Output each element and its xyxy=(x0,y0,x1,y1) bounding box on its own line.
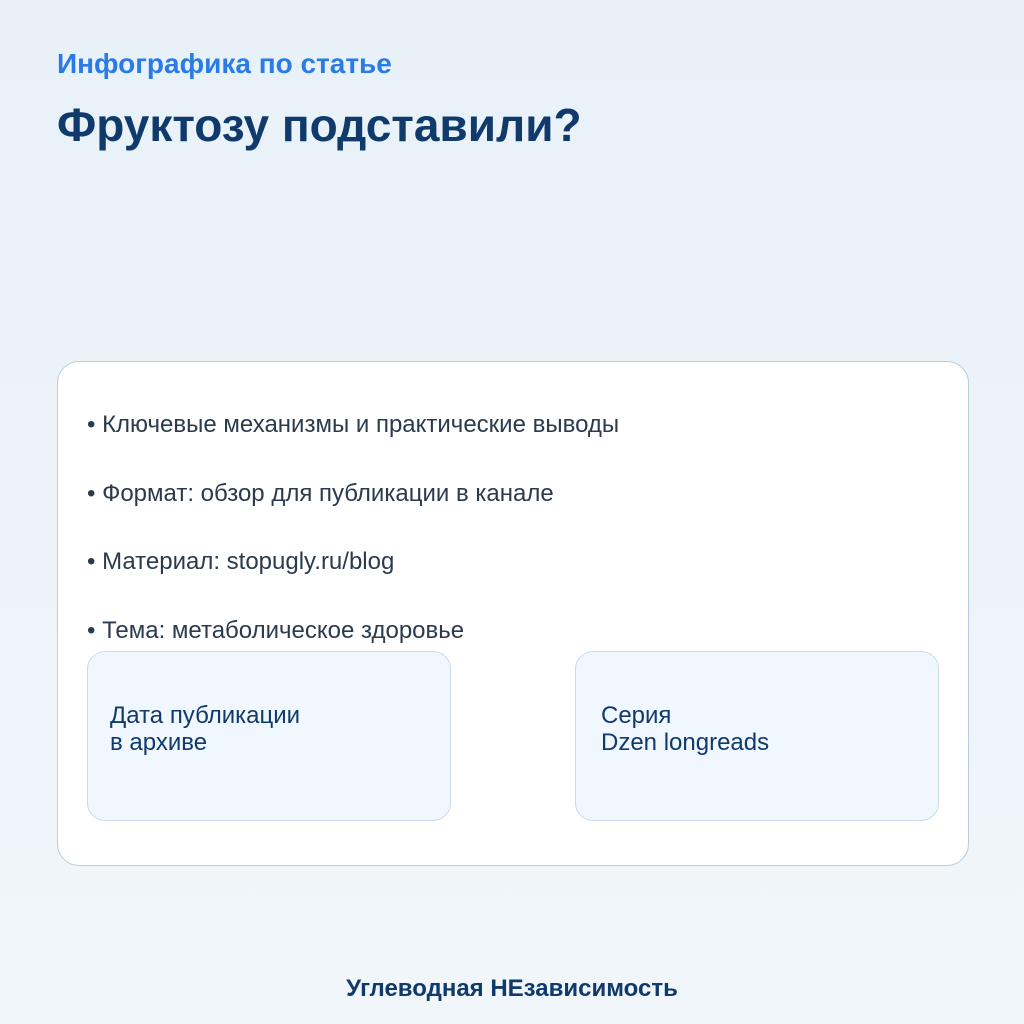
box: date xyxy=(87,651,451,821)
box: date: Дата публикации xyxy=(110,702,300,729)
box: date: в архиве xyxy=(110,729,207,756)
bullet list: • Тема: метаболическое здоровье xyxy=(87,617,464,644)
bullet list: • Материал: stopugly.ru/blog xyxy=(87,548,394,575)
footer: Углеводная НЕзависимость xyxy=(346,975,678,1002)
bullet list xyxy=(87,411,619,644)
title: Фруктозу подставили? xyxy=(57,99,582,151)
box: series xyxy=(575,651,939,821)
box: series: Dzen longreads xyxy=(601,729,769,756)
subtitle: Инфографика по статье xyxy=(57,48,392,79)
bullet list: • Формат: обзор для публикации в канале xyxy=(87,480,554,507)
bullet list: • Ключевые механизмы и практические выводы xyxy=(87,411,619,438)
panel: main card xyxy=(57,361,969,866)
box: series: Серия xyxy=(601,702,671,729)
